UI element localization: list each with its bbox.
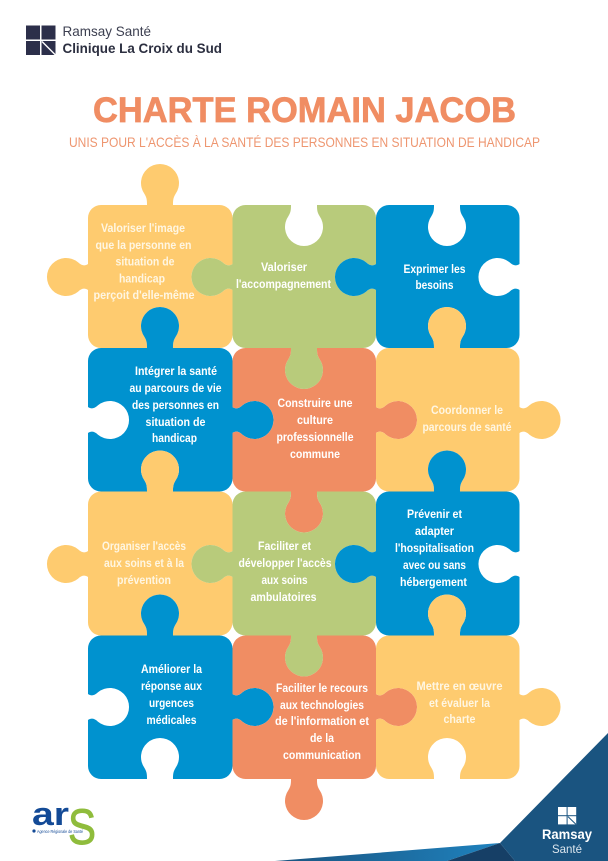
logo text: Ramsay Santé	[62, 23, 151, 39]
piece: Valoriser l'image	[47, 164, 232, 348]
piece: Valoriser l'image: que la personne en	[96, 239, 192, 252]
icon: Ramsay squares	[26, 26, 56, 55]
logo: Ramsay Santé white: Ramsay	[542, 827, 592, 842]
piece: Valoriser l'accompagnement: Valoriser	[261, 261, 307, 274]
piece: Valoriser l'image: perçoit d'elle-même	[94, 289, 195, 302]
piece: Mettre en œuvre et évaluer la charte: Mettre en œuvre	[416, 680, 503, 693]
piece: Mettre en œuvre et évaluer la charte: charte	[444, 713, 476, 726]
piece: Prévenir et adapter l'hospitalisation	[335, 451, 520, 636]
piece: Intégrer la santé: situation de	[146, 416, 206, 429]
piece: Faciliter et développer l'accès aux soins ambulatoires: ambulatoires	[250, 591, 316, 604]
piece: Coordonner le parcours de santé: Coordonner le	[431, 404, 503, 417]
piece: Valoriser l'image: Valoriser l'image	[101, 222, 185, 235]
logo: ARS: S	[68, 799, 96, 855]
corner decoration: bottom right band	[275, 733, 608, 861]
piece: Organiser l'accès: Organiser l'accès	[102, 540, 186, 553]
panel: puzzle grid	[47, 164, 561, 820]
piece: Faciliter et développer l'accès aux soins ambulatoires	[191, 492, 376, 676]
icon: white squares	[558, 807, 576, 824]
piece: Faciliter et développer l'accès aux soins ambulatoires: aux soins	[262, 574, 308, 587]
piece: Intégrer la santé: handicap	[152, 432, 197, 445]
piece: Prévenir et adapter l'hospitalisation: hébergement	[400, 576, 467, 589]
piece: Faciliter le recours aux technologies: communication	[283, 749, 361, 762]
piece: Intégrer la santé: Intégrer la santé	[135, 365, 217, 378]
piece: Exprimer les besoins: Exprimer les	[404, 263, 466, 276]
piece: Intégrer la santé: au parcours de vie	[130, 382, 222, 395]
piece: Organiser l'accès: aux soins et à la	[104, 557, 184, 570]
logo: Ramsay Santé white	[542, 807, 592, 856]
piece: Prévenir et adapter l'hospitalisation: Prévenir et	[407, 508, 462, 521]
piece: Construire une culture professionnelle commune: professionnelle	[276, 431, 354, 444]
piece: Construire une culture professionnelle commune: Construire une	[278, 397, 353, 410]
piece: Organiser l'accès: prévention	[117, 574, 171, 587]
piece: Faciliter le recours aux technologies: aux technologies	[280, 699, 364, 712]
logo: ARS: ar	[32, 796, 69, 832]
piece: Faciliter et développer l'accès aux soins ambulatoires: Faciliter et	[258, 540, 311, 553]
piece: Valoriser l'image: handicap	[119, 272, 165, 286]
piece: Coordonner le parcours de santé: parcours de santé	[422, 421, 512, 434]
piece: Exprimer les besoins: besoins	[416, 279, 454, 292]
piece: Exprimer les besoins	[335, 205, 520, 348]
piece: Organiser l'accès	[47, 451, 232, 636]
title: CHARTE ROMAIN JACOB	[93, 91, 516, 130]
piece: Mettre en œuvre et évaluer la charte	[376, 595, 561, 779]
piece: Construire une culture professionnelle commune	[232, 348, 417, 532]
piece: Faciliter le recours aux technologies: de la	[310, 732, 334, 745]
logo: Ramsay Santé Clinique La Croix du Sud	[26, 23, 222, 56]
piece: Mettre en œuvre et évaluer la charte: et évaluer la	[429, 697, 490, 710]
piece: Valoriser l'accompagnement: l'accompagnement	[236, 278, 331, 291]
piece: Construire une culture professionnelle commune: culture	[297, 414, 334, 427]
piece: Prévenir et adapter l'hospitalisation: l'hospitalisation	[395, 542, 474, 555]
logo: ARS	[32, 796, 96, 855]
piece: Améliorer la réponse aux urgences médicales: médicales	[146, 714, 196, 727]
piece: Améliorer la réponse aux urgences médicales: urgences	[149, 697, 194, 710]
piece: Construire une culture professionnelle commune: commune	[290, 448, 340, 461]
piece: Améliorer la réponse aux urgences médicales: Améliorer la	[141, 663, 203, 676]
subtitle: UNIS POUR L'ACCÈS À LA SANTÉ DES PERSONNES EN SITUATION DE HANDICAP	[69, 134, 540, 150]
logo: ARS: Agence Régionale de Santé	[37, 829, 83, 834]
logo text: Clinique La Croix du Sud	[62, 41, 222, 56]
piece: Intégrer la santé	[88, 307, 274, 492]
logo: Ramsay Santé white: Santé	[552, 842, 582, 856]
logo text	[62, 23, 222, 56]
piece: Améliorer la réponse aux urgences médicales: réponse aux	[141, 680, 202, 693]
piece: Faciliter le recours aux technologies: Faciliter le recours	[276, 682, 368, 695]
piece: Faciliter le recours aux technologies: de l'information et	[275, 715, 369, 728]
piece: Améliorer la réponse aux urgences médicales	[88, 595, 274, 779]
piece: Coordonner le parcours de santé	[376, 307, 561, 492]
piece: Faciliter le recours aux technologies	[232, 636, 417, 820]
piece: Valoriser l'image: situation de	[116, 256, 175, 268]
piece: Prévenir et adapter l'hospitalisation: adapter	[415, 525, 454, 538]
piece: Valoriser l'accompagnement	[191, 205, 376, 389]
piece: Faciliter et développer l'accès aux soins ambulatoires: développer l'accès	[238, 557, 332, 570]
piece: Intégrer la santé: des personnes en	[132, 399, 219, 412]
piece: Prévenir et adapter l'hospitalisation: avec ou sans	[403, 559, 466, 572]
